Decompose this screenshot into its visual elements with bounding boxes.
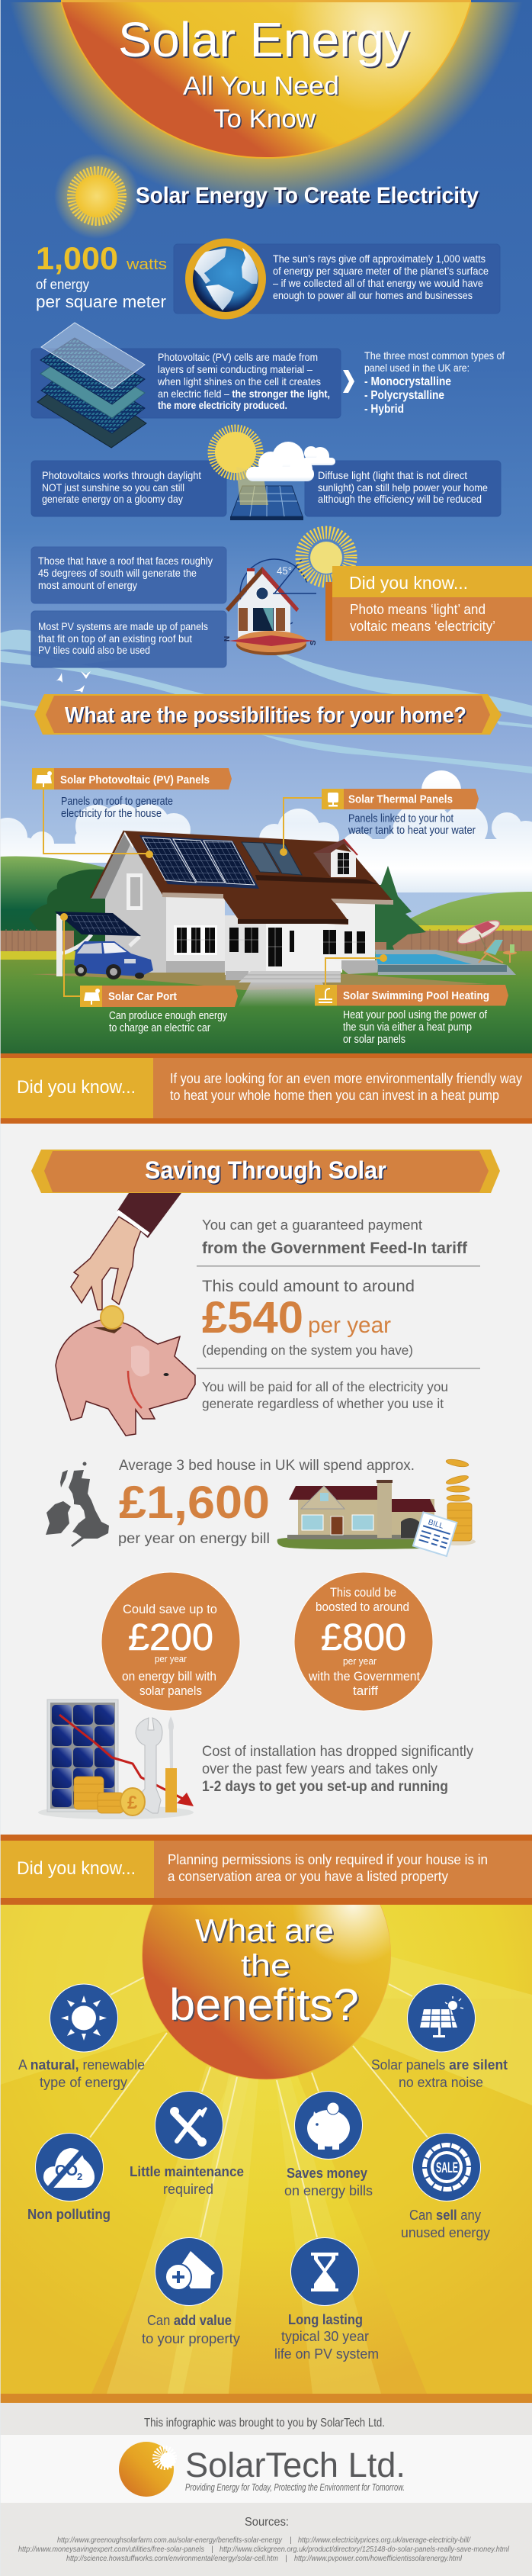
logo: SolarTech Ltd: Providing Energy for Today, Protecting the Environment for Tomorrow. (185, 2482, 405, 2493)
benefit: natural renewable (18, 1984, 145, 2090)
text: government feed-in tariff: This could amount to around (202, 1278, 415, 1295)
benefit: saves money: on energy bills (284, 2183, 373, 2198)
panel types list: The three most common types of (364, 349, 505, 362)
text: government feed-in tariff (197, 1217, 480, 1411)
icon: house with bill and coins (277, 1480, 476, 1549)
stat: £540 per year: £540 (202, 1293, 303, 1343)
label: solar car port: to charge an electric car (109, 1021, 210, 1034)
text: cost of installation: 1-2 days to get you set-up and running (202, 1778, 448, 1795)
panel: photovoltaic cells: the more electricity produced. (158, 399, 287, 411)
stat: 1,000 watts: per square meter (36, 292, 166, 311)
icon: solar panel, falling cost arrow, coins and tools (38, 1700, 194, 1819)
label: solar swimming pool heating: or solar panels (343, 1033, 405, 1046)
icon: solar panel, falling cost arrow, coins and tools: £ (127, 1793, 138, 1813)
benefit: non polluting: 2 (77, 2171, 82, 2182)
title: All You Need (183, 72, 339, 101)
bar: did you know heat pump: Did you know... (17, 1077, 136, 1098)
circle: boosted to £800 (294, 1572, 433, 1711)
banner: what are the possibilities (34, 694, 502, 735)
title: All You Need (184, 73, 340, 102)
panel: daylight: generate energy on a gloomy day (42, 493, 183, 505)
heading: what are the benefits: benefits? (169, 1980, 359, 2030)
benefit: can sell energy (401, 2133, 490, 2240)
panel: diffuse light: although the efficiency will be reduced (318, 493, 482, 505)
label: solar PV panels: Panels on roof to generate (61, 795, 173, 808)
sources: http://science.howstuffworks.com/environmental/energy/solar-cell.htm (66, 2554, 278, 2563)
label: solar swimming pool heating (315, 954, 508, 1046)
icon: sun burst (54, 153, 139, 239)
panel: PV systems (31, 611, 226, 667)
panel: roof facing south: most amount of energy (38, 579, 137, 591)
PV panels (139, 835, 259, 889)
main title sun (0, 0, 532, 208)
text: cost of installation: Cost of installation has dropped significantly (202, 1743, 473, 1760)
label: solar swimming pool heating: the sun via either a heat pump (343, 1021, 472, 1034)
heading: what are the benefits: the (241, 1949, 290, 1983)
icon: house with solar panels (91, 831, 393, 1007)
icon: energy bill (413, 1513, 457, 1556)
benefit: little maintenance: required (163, 2182, 213, 2197)
sky background (0, 0, 532, 1060)
circle: boosted to £800: per year (343, 1655, 377, 1667)
label: solar thermal panels: water tank to heat your water (348, 824, 476, 837)
circle: boosted to £800: with the Government (308, 1669, 420, 1684)
benefit: silent: no extra noise (399, 2075, 483, 2090)
sources: http://www.greenoughsolarfarm.com.au/solar-energy/benefits-solar-energy (57, 2536, 283, 2545)
text: government feed-in tariff: from the Government Feed-In tariff (202, 1240, 468, 1257)
benefit: natural renewable: A natural, renewable (18, 2057, 145, 2073)
title: Solar Energy (120, 14, 411, 69)
benefit: long lasting: Long lasting (288, 2312, 363, 2327)
stat: 1,000 watts: 1,000 (36, 240, 118, 276)
benefits sun (142, 1905, 391, 2079)
stat: £1,600: £1,600 (119, 1477, 270, 1528)
heading: what are the benefits: the (242, 1950, 292, 1984)
benefit: can sell energy: unused energy (401, 2225, 490, 2240)
sky wisps (0, 629, 532, 773)
icon: photovoltaic layers (37, 323, 146, 448)
circle: boosted to £800: £800 (321, 1617, 406, 1658)
panel: daylight (31, 461, 226, 516)
benefit: add value: to your property (142, 2331, 240, 2346)
panel: PV systems: PV tiles could also be used (38, 644, 150, 656)
panel: roof facing south (31, 547, 226, 603)
icon: car port with solar panel and car (55, 912, 153, 979)
label: solar thermal panels (280, 789, 479, 856)
panel types list: - Polycrystalline (364, 389, 444, 402)
benefit: saves money: Saves money (287, 2166, 367, 2181)
circle: save up to £200: solar panels (139, 1684, 202, 1698)
benefit: little maintenance: Little maintenance (130, 2164, 244, 2179)
label: solar thermal panels: Solar Thermal Panels (348, 793, 453, 806)
label: solar swimming pool heating: Solar Swimming Pool Heating (343, 989, 489, 1002)
panel: 1,000 watts explanation: The sun’s rays give off approximately 1,000 watts (273, 252, 486, 265)
circle: boosted to £800: boosted to around (316, 1600, 409, 1614)
icon: sun over house (302, 532, 351, 581)
icon: swimming pool and deck chair (375, 916, 517, 975)
bar: did you know heat pump (0, 1053, 532, 1124)
text: cost of installation: over the past few years and takes only (202, 1761, 437, 1777)
benefits background with rays (0, 1905, 532, 2394)
circle: save up to £200: £200 (128, 1617, 213, 1658)
text: government feed-in tariff: (depending on the system you have) (202, 1343, 413, 1358)
callout: photo means light (325, 566, 532, 641)
panel: daylight: Photovoltaics works through daylight (42, 469, 201, 481)
bar: did you know heat pump: to heat your whole home then you can invest in a heat pump (170, 1088, 499, 1103)
icon: stack of coins (445, 1458, 472, 1541)
circle: save up to £200: per year (155, 1653, 187, 1664)
title (118, 12, 411, 134)
panel: diffuse light: Diffuse light (light that is not direct (318, 469, 467, 481)
text: government feed-in tariff: You will be paid for all of the electricity you (202, 1379, 448, 1394)
icon: UK map (46, 1462, 109, 1547)
benefit: little maintenance (130, 2092, 244, 2197)
panel types list: - Hybrid (364, 403, 404, 416)
stat: £1,600 (118, 1457, 415, 1547)
stat: 1,000 watts (36, 240, 167, 311)
title: To Know (215, 105, 317, 134)
panel: daylight: NOT just sunshine so you can still (42, 481, 184, 494)
text: government feed-in tariff: You can get a guaranteed payment (202, 1217, 422, 1233)
stat: 1,000 watts: watts (126, 256, 167, 273)
benefit: can sell energy: Can sell any (409, 2208, 481, 2223)
benefit: natural renewable: type of energy (40, 2075, 127, 2090)
benefit: silent (371, 1984, 508, 2090)
sources: | (285, 2554, 287, 2563)
panel: 1,000 watts explanation: enough to power all our homes and businesses (273, 289, 473, 301)
callout: photo means light: voltaic means ‘electricity’ (350, 619, 495, 634)
thermal panels (242, 842, 302, 875)
panel: 1,000 watts explanation (174, 244, 500, 314)
text: government feed-in tariff: generate regardless of whether you use it (202, 1396, 444, 1411)
panel: photovoltaic cells (31, 349, 341, 418)
benefit: long lasting: life on PV system (274, 2346, 379, 2362)
heading: what are the benefits (169, 1912, 361, 2031)
clouds behind house (0, 770, 532, 892)
house walls (105, 844, 377, 980)
callout: photo means light: Photo means ‘light’ and (350, 602, 486, 617)
footer background (0, 2394, 532, 2576)
icon: energy bill: BILL (427, 1518, 445, 1531)
label: solar PV panels (32, 768, 232, 858)
text: cost of installation (202, 1743, 473, 1795)
bar: did you know planning: a conservation area or you have a listed property (168, 1869, 448, 1884)
label: solar thermal panels: Panels linked to your hot (348, 812, 454, 825)
circle: save up to £200: Could save up to (123, 1602, 217, 1616)
logo: SolarTech Ltd: SolarTech Ltd. (185, 2446, 405, 2484)
panel: photovoltaic cells: when light shines on the cell it creates (157, 375, 321, 388)
sources: | (290, 2536, 292, 2545)
benefit: non polluting: CO (55, 2163, 78, 2179)
heading: what are the benefits: benefits? (171, 1982, 361, 2031)
heading: what are the benefits: What are (195, 1912, 334, 1948)
sources: http://www.moneysavingexpert.com/utilities/free-solar-panels (18, 2545, 205, 2554)
panel: photovoltaic cells: Photovoltaic (PV) cells are made from (158, 351, 318, 363)
stat: £540 per year: per year (308, 1313, 391, 1338)
icon: house with compass and 45 degree angle: S (309, 640, 318, 645)
label: solar car port: Solar Car Port (108, 990, 177, 1003)
sources: | (211, 2545, 213, 2554)
hills and fences (0, 857, 532, 954)
path (238, 982, 332, 1007)
label: solar car port (60, 913, 238, 1034)
circle: save up to £200: on energy bill with (122, 1669, 216, 1684)
label: solar swimming pool heating: Heat your pool using the power of (343, 1008, 488, 1021)
icon: house with compass and 45 degree angle: 45° (277, 564, 292, 577)
callout: photo means light: Did you know... (349, 573, 468, 593)
ground (0, 951, 532, 1053)
roof (91, 831, 393, 925)
icon: solar panel under sun and clouds (212, 429, 335, 520)
banner: what are the possibilities: What are the possibilities for your home? (66, 705, 468, 729)
panel: roof facing south: Those that have a roof that faces roughly (38, 555, 213, 567)
circle: boosted to £800: tariff (353, 1684, 378, 1698)
stat: £540 per year (202, 1293, 391, 1343)
benefit: long lasting (274, 2238, 379, 2362)
steps (239, 971, 341, 982)
benefit: add value: Can add value (147, 2313, 232, 2328)
icon: pine tree (375, 866, 426, 951)
left edge line (0, 0, 1, 2576)
section heading: solar energy to create electricity: Solar Energy To Create Electricity (137, 185, 480, 210)
label: solar car port: Can produce enough energy (109, 1009, 227, 1022)
panel types list: panel used in the UK are: (364, 362, 470, 374)
icon: house with compass and 45 degree angle: N (223, 636, 232, 642)
benefit: can sell energy: SALE (436, 2160, 458, 2176)
section heading: solar energy to create electricity: Solar Energy To Create Electricity (136, 183, 479, 208)
stat: £1,600: per year on energy bill (118, 1530, 270, 1547)
stat: 1,000 watts: of energy (36, 277, 89, 292)
panel: diffuse light: sunlight) can still help power your home (318, 481, 488, 494)
benefit: long lasting: typical 30 year (281, 2329, 369, 2344)
banner: what are the possibilities: What are the possibilities for your home? (65, 703, 466, 728)
dormer (313, 839, 357, 877)
label: solar PV panels: electricity for the house (61, 807, 162, 820)
benefit: non polluting: Non polluting (27, 2207, 111, 2222)
banner: saving through solar: Saving Through Solar (146, 1158, 387, 1185)
sources (18, 2516, 510, 2563)
icon: birds (56, 671, 91, 693)
light grey saving section background (0, 1124, 532, 1835)
sources: http://www.pvpower.com/howefficientissolarenergy.html (294, 2554, 463, 2563)
panel: 1,000 watts explanation: – if we collected all of that energy we would have (273, 277, 483, 289)
title: Solar Energy (118, 12, 409, 67)
sources: Sources: (245, 2516, 289, 2529)
panel: diffuse light (305, 461, 501, 516)
icon: globe (185, 238, 266, 319)
panel: PV systems: that fit on top of an existing roof but (38, 632, 192, 645)
arrow: chevron (343, 370, 354, 393)
circle: save up to £200 (101, 1572, 240, 1711)
panel types list (364, 349, 505, 416)
stat: £1,600: Average 3 bed house in UK will spend approx. (119, 1457, 415, 1474)
title: To Know (213, 105, 316, 133)
bar: did you know planning (0, 1835, 532, 1905)
panel: 1,000 watts explanation: of energy per square meter of the planet’s surface (273, 265, 489, 277)
panel: PV systems: Most PV systems are made up of panels (38, 620, 208, 632)
benefit: non polluting (27, 2133, 111, 2222)
benefit: silent: Solar panels are silent (371, 2057, 508, 2073)
panel: photovoltaic cells: an electric field – the stronger the light, (158, 388, 330, 400)
benefit: add value (142, 2238, 240, 2346)
heading: what are the benefits: What are (197, 1914, 335, 1950)
bar: did you know planning: Did you know... (17, 1858, 136, 1879)
panel: photovoltaic cells: layers of semi conducting material – (158, 363, 312, 375)
icon: house with compass and 45 degree angle (223, 547, 321, 655)
windows and door (174, 925, 365, 966)
panel types list: - Monocrystalline (364, 375, 451, 388)
panel: roof facing south: 45 degrees of south will generate the (38, 567, 197, 579)
circle: boosted to £800: This could be (330, 1585, 396, 1600)
sources: http://www.electricityprices.org.uk/average-electricity-bill/ (298, 2536, 471, 2545)
credit line: This infographic was brought to you by SolarTech Ltd. (144, 2417, 385, 2430)
logo: SolarTech Ltd (119, 2442, 405, 2497)
banner: saving through solar: Saving Through Solar (145, 1156, 386, 1184)
icon: piggy bank (56, 1306, 195, 1436)
bar: did you know planning: Planning permissions is only required if your house is in (168, 1852, 488, 1867)
icon: hand dropping coin (71, 1193, 181, 1310)
banner: saving through solar (31, 1150, 500, 1193)
benefit: saves money (284, 2092, 373, 2198)
label: solar PV panels: Solar Photovoltaic (PV) Panels (60, 773, 210, 786)
